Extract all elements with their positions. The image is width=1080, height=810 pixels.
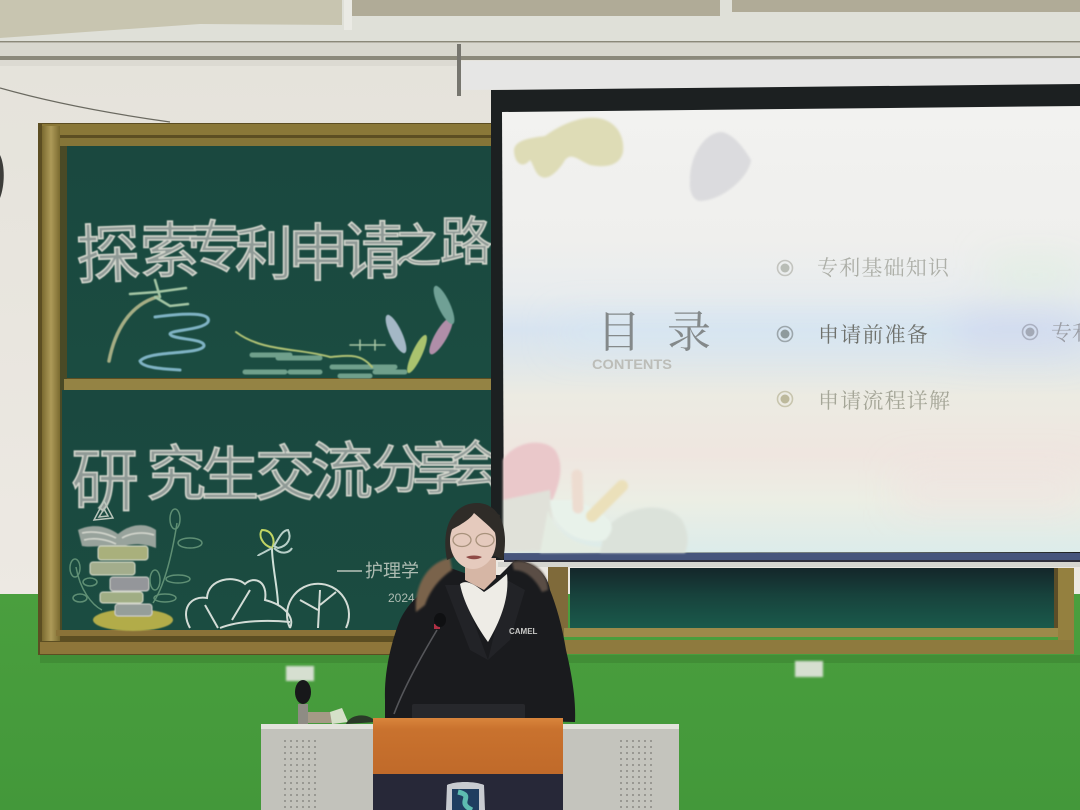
neck xyxy=(465,558,496,590)
slide title: 目录 xyxy=(597,308,737,357)
chalk title upper: 请 xyxy=(342,218,404,287)
upper board panel xyxy=(67,146,495,378)
chalk title lower: 会 xyxy=(450,437,500,493)
board centre rail xyxy=(64,379,495,390)
slide menu item 3: 申请流程详解 xyxy=(818,389,951,413)
slide blob: yellow xyxy=(514,118,623,178)
chalk title lower: 研 xyxy=(71,444,139,520)
fur hood xyxy=(416,558,548,612)
chalk title upper: 利 xyxy=(235,222,293,287)
chalk doodle: leaves and sprout xyxy=(186,530,349,628)
slide menu item 4 xyxy=(1022,321,1080,345)
speaker grille left xyxy=(283,740,316,810)
mouth xyxy=(466,556,482,559)
chalk doodle: book stack xyxy=(78,525,173,631)
ceiling xyxy=(0,0,1080,122)
chalk title upper: 专 xyxy=(187,216,243,279)
slide colour bands xyxy=(560,255,1080,510)
lower right board xyxy=(400,566,1074,654)
clutter on podium xyxy=(308,708,376,724)
chalk title upper: 路 xyxy=(440,214,492,272)
slide menu item 2: 申请前准备 xyxy=(818,323,929,347)
glasses xyxy=(453,534,494,546)
chalk doodle: river and stalk xyxy=(109,280,208,370)
chalk title lower: 流 xyxy=(311,438,373,507)
chalk signature xyxy=(337,561,419,605)
monitor xyxy=(412,704,525,719)
face xyxy=(450,513,496,569)
slide menu item 1: 专利基础知识 xyxy=(817,256,950,280)
board frame xyxy=(38,123,496,655)
coat logo: CAMEL xyxy=(509,627,538,636)
wall tags xyxy=(286,661,823,681)
slide blob: pink and green xyxy=(503,443,688,553)
podium front xyxy=(373,774,563,810)
blackboard xyxy=(38,123,500,655)
chalk title upper xyxy=(75,214,492,292)
chalk doodle: feathers xyxy=(382,283,458,375)
hair xyxy=(445,503,505,560)
wall clock edge xyxy=(0,155,4,198)
slide subtitle: CONTENTS xyxy=(592,356,672,372)
coat xyxy=(385,560,575,722)
slide blob: grey xyxy=(690,132,751,201)
speaker grille right xyxy=(620,740,653,810)
podium xyxy=(261,704,679,810)
chalk title lower: 分 xyxy=(372,442,424,500)
chalk triangle xyxy=(94,501,113,520)
chalk title lower: 交 xyxy=(255,441,315,508)
speaker xyxy=(385,503,575,722)
chalk doodle: vines xyxy=(70,509,202,610)
podium desk top xyxy=(373,718,563,774)
shirt xyxy=(460,574,507,642)
lower board panel xyxy=(62,390,496,630)
chalk title lower xyxy=(71,437,500,520)
chalk title upper: 探 xyxy=(75,218,141,292)
chalk title lower: 生 xyxy=(201,443,259,508)
chalk title lower: 究 xyxy=(146,441,206,508)
projection screen xyxy=(491,84,1080,567)
chalk title upper: 之 xyxy=(395,220,441,272)
microphone: desk xyxy=(295,680,311,724)
screen bottom bar xyxy=(498,553,1080,567)
chalk signature: 2024 xyxy=(388,591,415,605)
chalk signature: 护理学 xyxy=(365,561,419,581)
microphone: speaker xyxy=(394,613,446,714)
chalk title upper: 申 xyxy=(287,220,349,289)
chalk title upper: 索 xyxy=(140,218,200,285)
podium emblem xyxy=(446,782,485,810)
chalk doodle: vine and steps xyxy=(236,332,405,376)
chalk title lower: 享 xyxy=(412,438,468,501)
